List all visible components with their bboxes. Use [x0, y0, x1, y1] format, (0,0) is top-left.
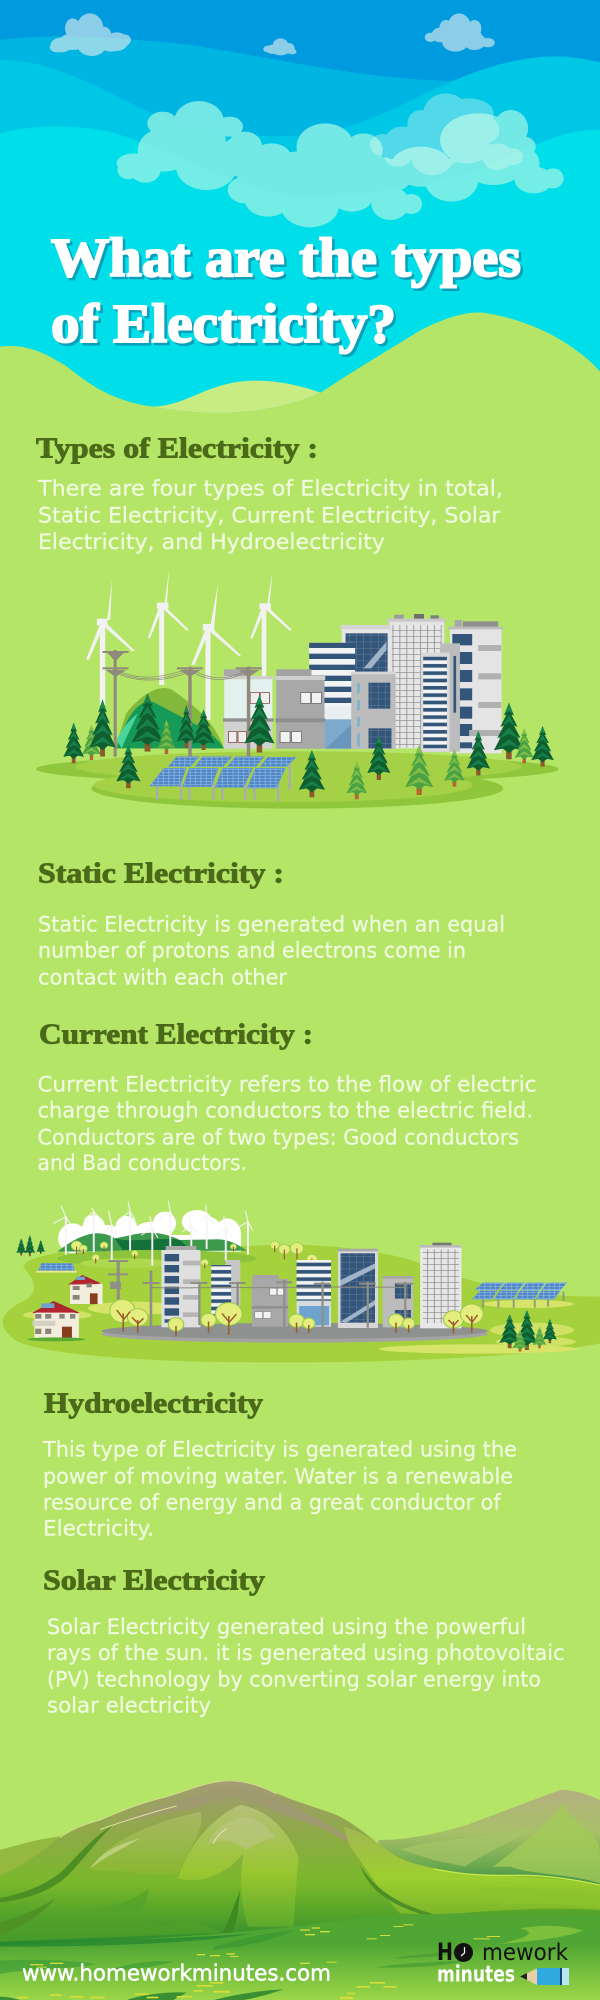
text: types of electricity: Static Electricity, Current Electricity, Solar	[38, 504, 501, 528]
utility poles	[108, 1260, 413, 1329]
ground	[3, 1245, 600, 1362]
icon: pencil	[520, 1968, 569, 1985]
heading: static electricity: Static Electricity :	[38, 857, 284, 889]
icon: clock	[454, 1943, 473, 1962]
text: current electricity: Current Electricity refers to the flow of electric	[38, 1073, 536, 1097]
clouds behind hills	[58, 1210, 241, 1253]
text: solar electricity	[47, 1615, 564, 1718]
text: solar electricity: Solar Electricity generated using the powerful	[47, 1615, 526, 1639]
heading: solar electricity: Solar Electricity	[43, 1564, 266, 1596]
green hills	[0, 313, 600, 467]
left solar panels	[36, 1263, 77, 1273]
mountain landscape footer	[0, 1780, 600, 2000]
pine clusters	[16, 1235, 557, 1352]
text: current electricity	[38, 1073, 536, 1175]
sky and hills header	[0, 0, 600, 467]
logo: homework minutes	[437, 1938, 569, 1988]
round trees	[110, 1299, 483, 1337]
text: hydroelectricity: This type of Electricity is generated using the	[42, 1438, 517, 1462]
heading: hydroelectricity: Hydroelectricity	[44, 1388, 264, 1420]
mountain behind	[115, 688, 224, 748]
illustration: wind turbines, city and solar panels	[36, 570, 559, 809]
text: solar electricity: (PV) technology by converting solar energy into	[47, 1668, 541, 1692]
logo: homework minutes: mework	[482, 1940, 569, 1966]
text: solar electricity: solar electricity	[47, 1694, 211, 1718]
text: hydroelectricity: power of moving water. Water is a renewable	[43, 1464, 513, 1488]
small cloud left	[50, 13, 131, 56]
text: types of electricity: Electricity, and Hydroelectricity	[38, 530, 385, 554]
buildings	[161, 1243, 461, 1328]
title: of Electricity?	[54, 296, 398, 356]
small cloud centre	[263, 38, 297, 55]
meadow	[0, 1913, 600, 2000]
text: types of electricity: There are four types of Electricity in total,	[37, 477, 503, 501]
ground	[36, 751, 559, 809]
text: current electricity: Conductors are of two types: Good conductors	[38, 1125, 519, 1149]
large cloud bank	[117, 101, 564, 227]
title: of Electricity?	[51, 293, 396, 354]
glass building	[341, 625, 390, 676]
white house	[223, 669, 274, 749]
text: static electricity: contact with each other	[38, 965, 287, 989]
main mountain	[0, 1780, 600, 1947]
houses	[27, 1275, 103, 1341]
text: hydroelectricity: resource of energy and a great conductor of	[43, 1490, 501, 1514]
title: What are the types	[51, 227, 521, 288]
wind turbines	[86, 570, 292, 720]
narrow tower	[421, 643, 460, 752]
small cloud right	[425, 13, 495, 52]
background trees	[71, 1241, 317, 1268]
text: static electricity: Static Electricity is generated when an equal	[38, 913, 505, 937]
utility poles and wires	[103, 650, 262, 757]
meadow shadows and flowers	[0, 1924, 583, 2000]
logo: homework minutes: H	[437, 1938, 453, 1966]
far mountain	[378, 1790, 600, 1890]
heading: current electricity: Current Electricity :	[39, 1018, 313, 1050]
website url: www.homeworkminutes.com	[22, 1962, 331, 1987]
text: hydroelectricity	[42, 1438, 517, 1541]
text: static electricity	[38, 913, 505, 989]
text: current electricity: charge through conductors to the electric field.	[38, 1099, 533, 1123]
heading: types of electricity: Types of Electricity :	[36, 432, 318, 464]
road	[101, 1323, 488, 1343]
striped building	[309, 643, 355, 749]
tall grid building	[387, 614, 445, 748]
title: What are the types	[54, 230, 524, 290]
grey house	[276, 669, 325, 749]
illustration: renewable energy town	[3, 1202, 600, 1362]
mountain ridges and folds	[0, 1781, 600, 1942]
solar panels	[150, 757, 296, 802]
text: types of electricity	[37, 477, 503, 554]
right solar panels	[472, 1283, 567, 1308]
green hills	[57, 1233, 256, 1268]
grey block	[351, 672, 396, 749]
light hill	[153, 381, 321, 413]
text: static electricity: number of protons and electrons come in	[38, 939, 466, 963]
wind turbines	[54, 1202, 253, 1265]
text: current electricity: and Bad conductors.	[38, 1151, 247, 1175]
logo: homework minutes: minutes	[437, 1963, 515, 1988]
front bright cloud	[370, 93, 523, 175]
title	[51, 227, 524, 356]
text: hydroelectricity: Electricity.	[43, 1517, 154, 1541]
text: solar electricity: rays of the sun. it is generated using photovoltaic	[47, 1641, 564, 1665]
pine trees	[63, 693, 554, 799]
right building	[448, 620, 503, 753]
